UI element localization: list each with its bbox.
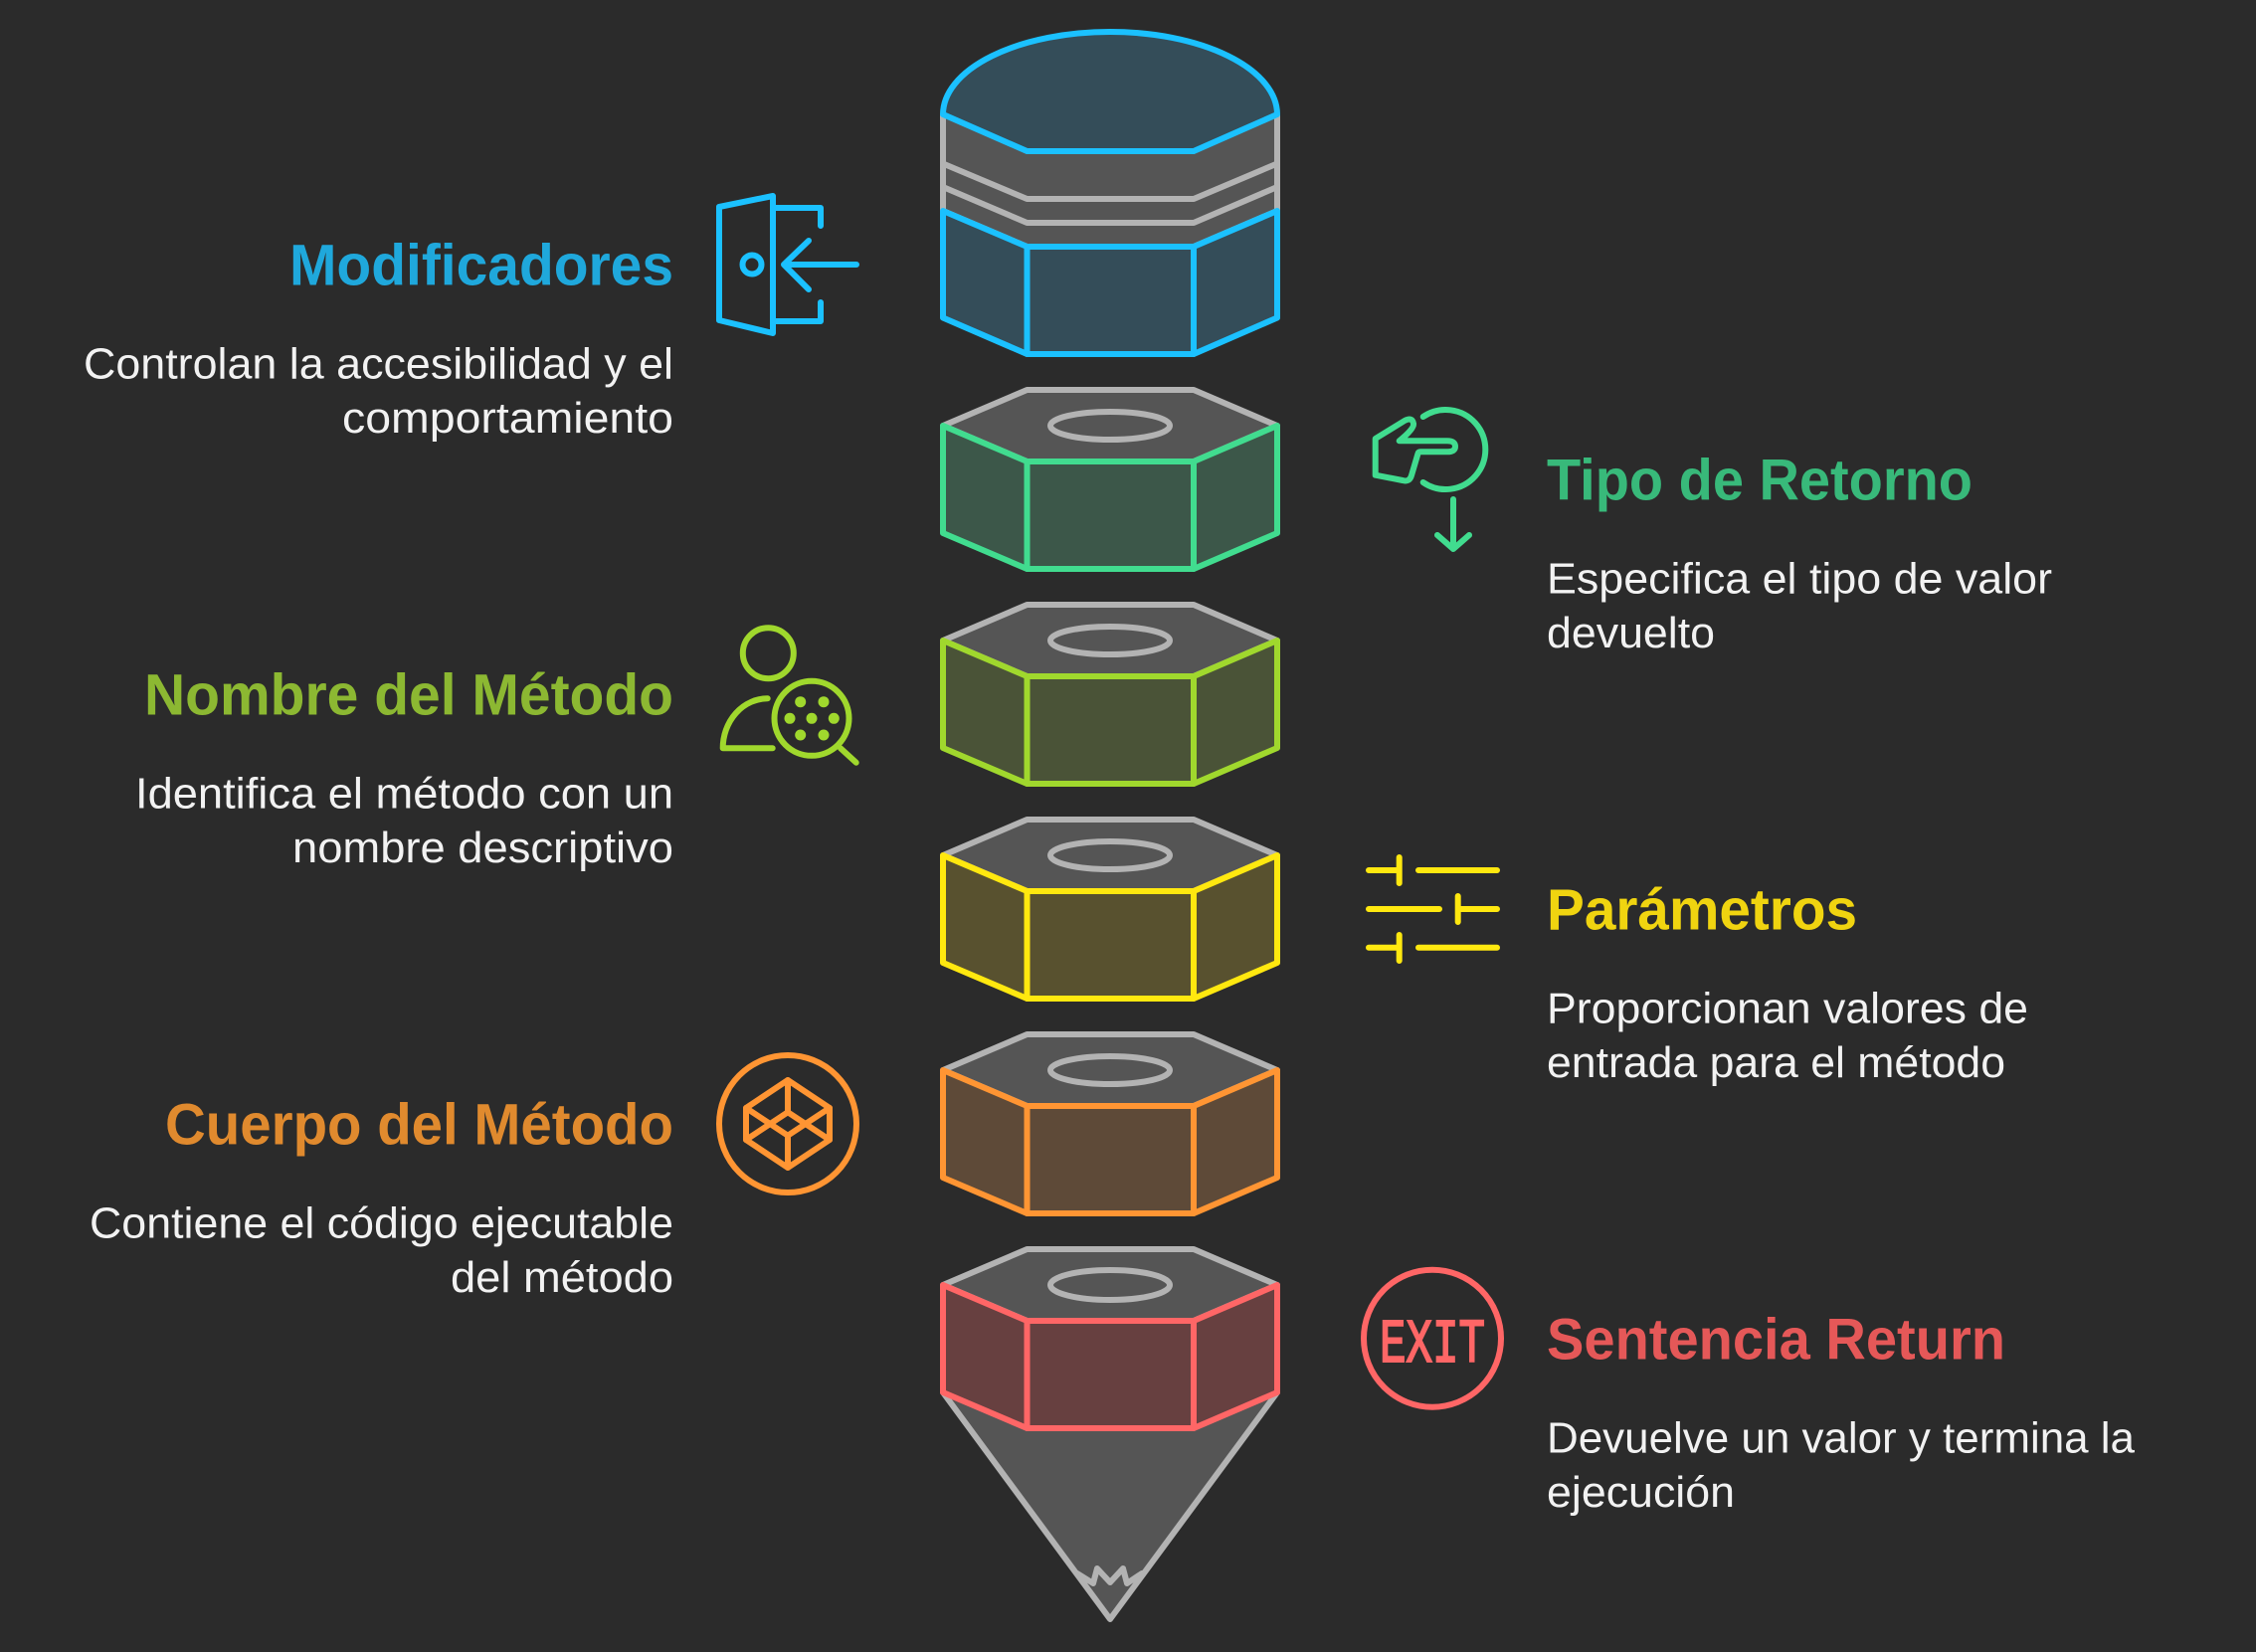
text block: Sentencia Return: ejecución [1547, 1468, 1735, 1517]
icon: hand pointing with return arrow [1376, 410, 1485, 549]
icon: exit sign in circle: EXIT [1380, 1310, 1485, 1380]
text block: Tipo de Retorno: Especifica el tipo de valor [1547, 555, 2052, 604]
layer: green nut (Tipo de Retorno) [943, 390, 1277, 569]
icon: door with entering arrow [719, 196, 856, 333]
layer: red nut with pointed tip (Sentencia Return) [943, 1249, 1277, 1619]
text block: Parámetros: entrada para el método [1547, 1038, 2005, 1087]
text block: Nombre del Método [135, 663, 673, 872]
text block: Sentencia Return: Sentencia Return [1547, 1308, 2005, 1373]
layer: lime nut (Nombre del Método) [943, 605, 1277, 784]
text block: Tipo de Retorno [1547, 449, 2052, 657]
text block: Cuerpo del Método: Cuerpo del Método [165, 1093, 673, 1158]
icon: code cube in circle [719, 1055, 856, 1193]
icon: person with magnifying glass [723, 628, 856, 763]
text block: Nombre del Método: nombre descriptivo [292, 824, 673, 872]
text block: Modificadores: Modificadores [289, 234, 673, 298]
text block: Parámetros [1547, 878, 2028, 1087]
text block: Modificadores [84, 234, 673, 443]
text block: Tipo de Retorno: Tipo de Retorno [1547, 449, 1973, 513]
layer: yellow nut (Parámetros) [943, 820, 1277, 999]
text block: Tipo de Retorno: devuelto [1547, 609, 1715, 657]
layer: top cap (Modificadores) [943, 32, 1277, 354]
text block: Parámetros: Parámetros [1547, 878, 1857, 943]
text block: Cuerpo del Método: Contiene el código ejecutable [90, 1199, 673, 1248]
icon: exit sign in circle [1364, 1270, 1501, 1407]
text block: Nombre del Método: Identifica el método con un [135, 770, 673, 819]
text block: Sentencia Return: Devuelve un valor y termina la [1547, 1414, 2136, 1463]
text block: Modificadores: Controlan la accesibilidad y el [84, 340, 673, 389]
text block: Cuerpo del Método [90, 1093, 673, 1302]
text block: Nombre del Método: Nombre del Método [144, 663, 673, 728]
text block: Parámetros: Proporcionan valores de [1547, 985, 2028, 1033]
icon: sliders [1369, 857, 1497, 961]
text block: Cuerpo del Método: del método [451, 1253, 673, 1302]
text block: Sentencia Return [1547, 1308, 2136, 1517]
text block: Modificadores: comportamiento [342, 394, 673, 443]
layer: orange nut (Cuerpo del Método) [943, 1034, 1277, 1213]
